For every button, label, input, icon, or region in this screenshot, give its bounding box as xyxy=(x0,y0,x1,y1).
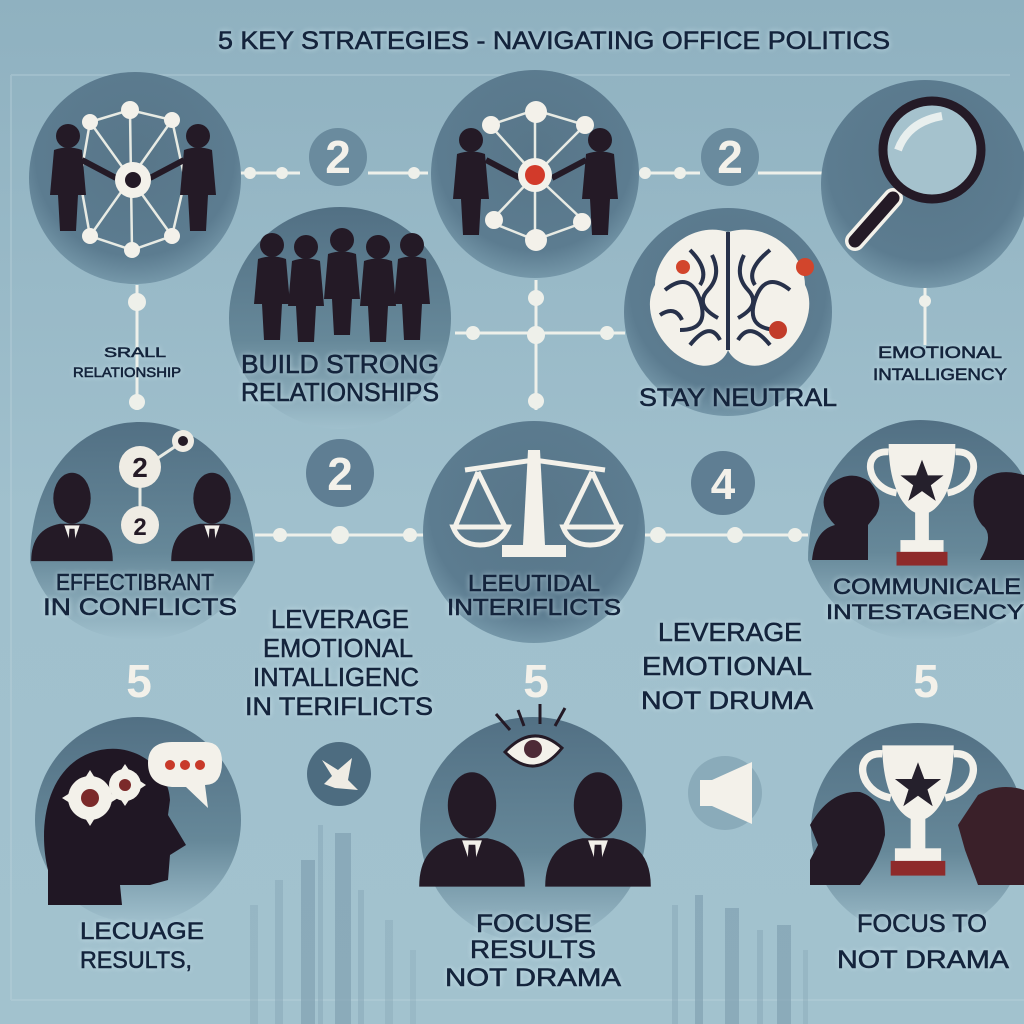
panel: magnifying glass xyxy=(821,80,1024,288)
panel: conflicts: IN CONFLICTS xyxy=(43,594,237,621)
text: leverage emotional right xyxy=(641,617,813,715)
panel: stay neutral with brain xyxy=(624,208,837,416)
label focuse results: NOT DRAMA xyxy=(445,964,621,992)
number 5 right: 5 xyxy=(913,655,939,707)
connectors row one xyxy=(240,167,822,179)
text: leverage emotional right: LEVERAGE xyxy=(658,617,802,647)
number badge 2 xyxy=(309,128,367,186)
connectors row two xyxy=(255,526,808,544)
connectors middle vertical xyxy=(128,280,931,410)
small label left xyxy=(73,344,181,380)
panel: network with two people xyxy=(29,72,241,284)
label: EFFECTIBRANT xyxy=(56,569,214,595)
label lecuage results xyxy=(80,918,204,974)
label: STAY NEUTRAL xyxy=(639,384,837,412)
small label left: SRALL xyxy=(104,344,166,360)
panel: two businessmen with eye xyxy=(419,704,651,943)
number badge 2 xyxy=(701,128,759,186)
label focus to not drama: FOCUS TO xyxy=(857,910,987,938)
text: leverage emotional left: EMOTIONAL xyxy=(263,633,413,663)
icon: megaphone xyxy=(688,756,762,830)
panel: network with red hub xyxy=(431,70,639,278)
label: LEEUTIDAL xyxy=(468,570,600,596)
label focuse results xyxy=(445,910,621,992)
text: leverage emotional left: LEVERAGE xyxy=(271,604,409,634)
text: leverage emotional left: INTALLIGENC xyxy=(253,662,419,692)
panel: head with gears xyxy=(35,717,241,923)
bar chart right decorative xyxy=(672,895,808,1024)
title: 5 KEY STRATEGIES - NAVIGATING OFFICE POLITICS xyxy=(218,27,890,55)
number badge 2: 2 xyxy=(327,448,353,500)
label focuse results: FOCUSE xyxy=(476,910,592,938)
number badge 2: 2 xyxy=(717,131,743,183)
text: leverage emotional left: IN TERIFLICTS xyxy=(245,693,433,721)
bar chart left decorative xyxy=(250,825,416,1024)
panel: trophy with two faces xyxy=(810,723,1024,937)
label lecuage results: LECUAGE xyxy=(80,918,204,945)
panel: conflicts xyxy=(30,422,255,640)
panel: trophy and communicate: INTESTAGENCY xyxy=(826,601,1024,624)
text: leverage emotional right: NOT DRUMA xyxy=(641,687,813,715)
label lecuage results: RESULTS, xyxy=(80,947,192,974)
panel: scales xyxy=(423,421,645,643)
label focus to not drama xyxy=(837,910,1009,974)
number badge 2 xyxy=(306,439,374,507)
panel: conflicts: 2 xyxy=(133,514,147,541)
number badge 2: 2 xyxy=(325,131,351,183)
panel: conflicts: 2 xyxy=(132,452,148,483)
text: leverage emotional left xyxy=(245,604,433,721)
panel: scales: INTERIFLICTS xyxy=(447,594,621,620)
number 5 left: 5 xyxy=(126,655,152,707)
label: BUILD STRONG xyxy=(241,349,439,379)
number 5 center: 5 xyxy=(523,655,549,707)
small label right: EMOTIONAL xyxy=(878,343,1002,362)
number badge 4: 4 xyxy=(711,460,736,509)
number badge 4 xyxy=(691,451,755,515)
panel: trophy and communicate xyxy=(808,420,1024,640)
label focuse results: RESULTS xyxy=(470,936,596,964)
small label left: RELATIONSHIP xyxy=(73,364,181,380)
panel: build strong relationships: RELATIONSHIPS xyxy=(241,377,439,407)
icon: small puzzle badge xyxy=(307,742,371,806)
small label right xyxy=(873,343,1007,384)
label focus to not drama: NOT DRAMA xyxy=(837,946,1009,974)
text: leverage emotional right: EMOTIONAL xyxy=(642,651,812,681)
label: COMMUNICALE xyxy=(833,574,1021,599)
panel: build strong relationships xyxy=(229,207,451,429)
small label right: INTALLIGENCY xyxy=(873,365,1007,384)
